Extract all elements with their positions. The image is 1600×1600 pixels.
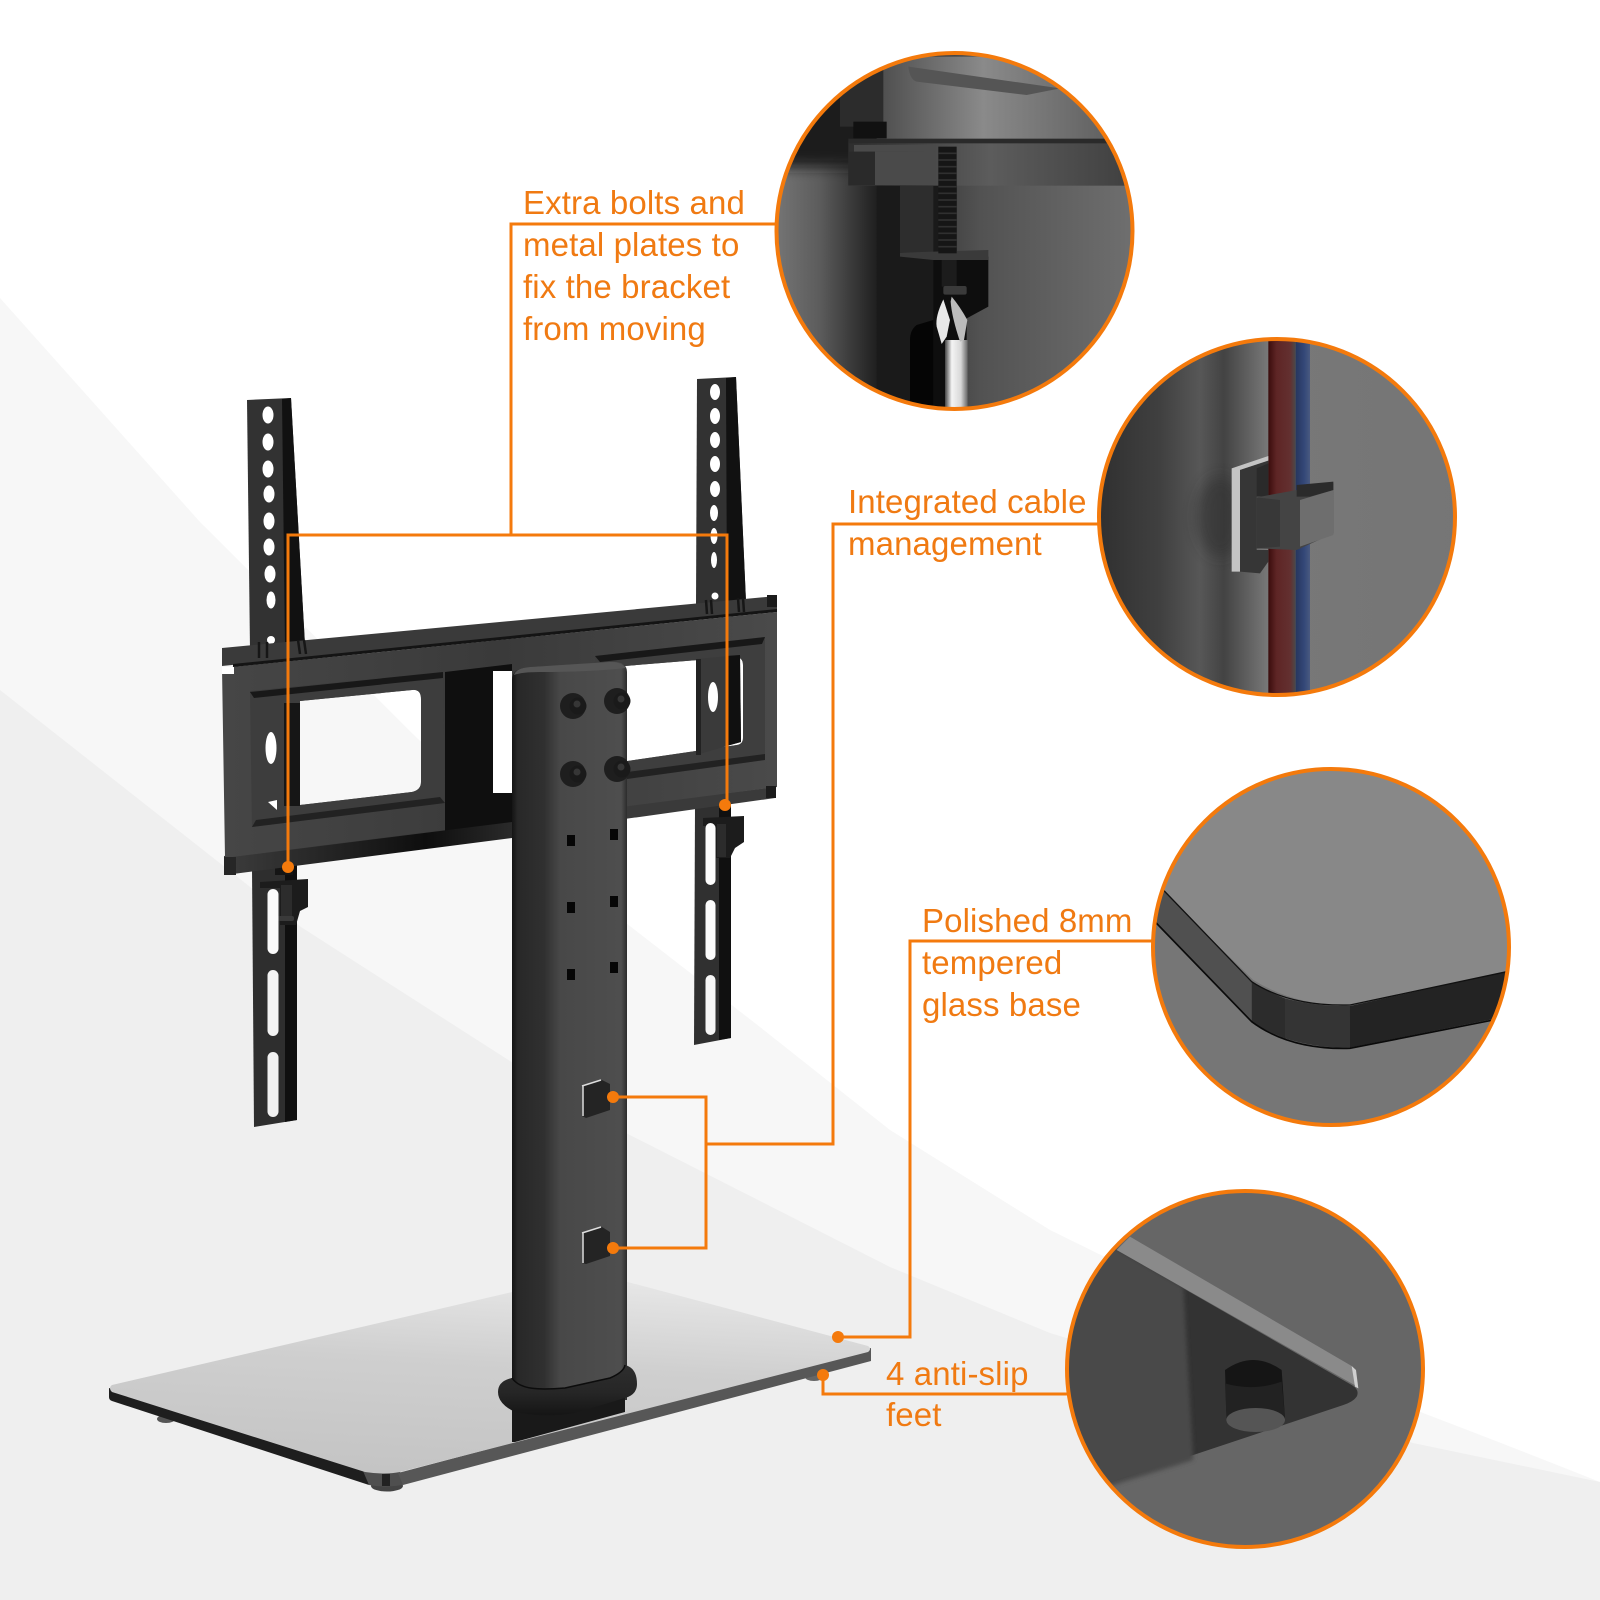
column mounting bolts [560, 688, 630, 787]
detail circle: cable management [1097, 337, 1457, 697]
label: polished tempered glass base: tempered [922, 944, 1062, 981]
background: darker grey sweep [0, 690, 1600, 1600]
label: integrated cable management: management [848, 525, 1042, 562]
detail circle: anti-slip foot [1065, 1189, 1425, 1549]
column adjustment holes [567, 829, 618, 980]
circle outline [776, 53, 1132, 409]
label: extra bolts and metal plates: from moving [523, 310, 706, 347]
horizontal mounting bracket [222, 595, 777, 875]
upper right VESA arm [696, 377, 746, 606]
circle outline [1153, 769, 1509, 1125]
upper cable clip [582, 1080, 610, 1118]
support column [512, 662, 627, 1400]
column collar [498, 1365, 637, 1415]
label: polished tempered glass base: glass base [922, 986, 1081, 1023]
lower cable clip [582, 1227, 610, 1264]
label: extra bolts and metal plates: metal plates to [523, 226, 739, 263]
label: polished tempered glass base: Polished 8mm [922, 902, 1133, 939]
leader line: bolts and plates [282, 224, 778, 873]
column reflection in glass [512, 1385, 625, 1442]
upper left VESA arm [247, 398, 305, 650]
label: anti-slip feet: feet [886, 1396, 942, 1433]
circle outline [1067, 1191, 1423, 1547]
label: extra bolts and metal plates: Extra bolts and [523, 184, 745, 221]
lower right VESA arm [694, 802, 744, 1045]
leader line: cable management [607, 524, 1101, 1254]
TV stand product illustration [109, 377, 871, 1492]
label: anti-slip feet: 4 anti-slip [886, 1355, 1029, 1392]
circle outline [1099, 339, 1455, 695]
label: extra bolts and metal plates: fix the bracket [523, 268, 730, 305]
label: integrated cable management: Integrated cable [848, 483, 1087, 520]
leader line: glass base [832, 941, 1155, 1343]
detail circle: bolts and metal plates [774, 51, 1134, 411]
detail circle: polished glass edge [1151, 767, 1511, 1127]
leader line: anti-slip feet [817, 1369, 1068, 1394]
glass base [109, 1273, 871, 1492]
lower left VESA arm [252, 857, 308, 1127]
